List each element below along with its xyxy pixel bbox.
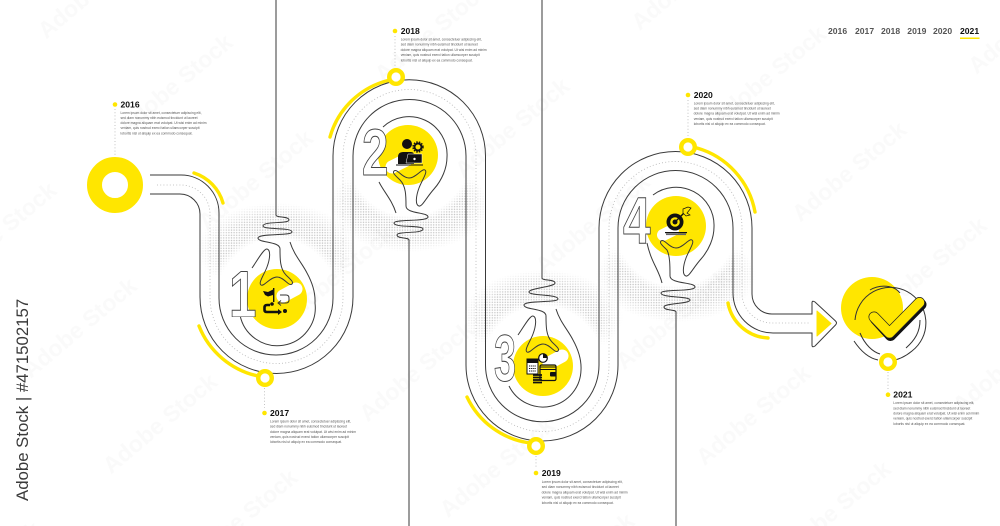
yellow accent arcs (194, 80, 768, 443)
text block 2017: sed diam nonummy nibh euismod tincidunt ut laoreet (270, 425, 347, 429)
text block 2020: Lorem ipsum dolor sit amet, consectetuer adipiscing elit, (694, 101, 775, 105)
node rings and connectors (115, 36, 895, 468)
text block 2018: lobortis nisl ut aliquip ex ea commodo consequat. (401, 58, 473, 62)
text block 2017: 2017 (270, 408, 289, 418)
text block 2016: sed diam nonummy nibh euismod tincidunt ut laoreet (120, 116, 198, 120)
text block 2016: Lorem ipsum dolor sit amet, consectetuer adipiscing elit, (120, 111, 202, 115)
number 1: 1 (229, 258, 257, 332)
text block 2017: Lorem ipsum dolor sit amet, consectetuer adipiscing elit, (270, 419, 351, 423)
winding road with arrow (150, 80, 836, 441)
bulb 3 (509, 0, 581, 407)
text block 2017: dolore magna aliquam erat volutpat. Ut wisi enim ad minim (270, 430, 356, 434)
text block 2019: 2019 (542, 468, 561, 478)
text block 2017: veniam, quis nostrud exerci tation ullamcorper suscipit (270, 435, 349, 439)
text block 2017: lobortis nisl ut aliquip ex ea commodo consequat. (270, 440, 342, 444)
text block 2017 (262, 408, 356, 444)
year navigation: 2018 (881, 26, 900, 36)
number 4: 4 (623, 184, 651, 258)
icon: check mark (874, 302, 921, 336)
arrow head yellow triangle (817, 311, 831, 336)
text block 2016: lobortis nisl ut aliquip ex ea commodo consequat. (120, 132, 193, 136)
text block 2016 (113, 100, 207, 136)
text block 2020: 2020 (694, 90, 713, 100)
text block 2020: lobortis nisl ut aliquip ex ea commodo consequat. (694, 122, 766, 126)
halftone: bulb 2 (334, 180, 484, 249)
year navigation: 2019 (907, 26, 927, 36)
year navigation: 2017 (855, 26, 874, 36)
halftone: bulb 3 (468, 273, 618, 342)
text block 2018: veniam, quis nostrud exerci tation ullamcorper suscipit (401, 53, 480, 57)
text block 2016: veniam, quis nostrud exerci tation ullamcorper suscipit (120, 126, 200, 130)
halftone: bulb 1 (202, 206, 352, 274)
bulb 4 (646, 187, 714, 526)
text block 2020: veniam, quis nostrud exerci tation ullamcorper suscipit (694, 117, 773, 121)
text block 2021: veniam, quis nostrud exerci tation ullamcorper suscipit (893, 417, 972, 421)
text block 2018 (393, 26, 487, 62)
text block 2018: sed diam nonummy nibh euismod tincidunt ut laoreet (401, 43, 478, 47)
text block 2016: 2016 (120, 100, 140, 110)
text block 2019: veniam, quis nostrud exerci tation ullamcorper suscipit (542, 496, 621, 500)
text block 2018: dolore magna aliquam erat volutpat. Ut wisi enim ad minim (401, 48, 487, 52)
text block 2021: Lorem ipsum dolor sit amet, consectetuer adipiscing elit, (893, 401, 974, 405)
year navigation: 2020 (933, 26, 952, 36)
text block 2021: sed diam nonummy nibh euismod tincidunt ut laoreet (893, 406, 970, 410)
text block 2019: Lorem ipsum dolor sit amet, consectetuer adipiscing elit, (542, 480, 623, 484)
text block 2019 (534, 468, 628, 505)
year navigation: 2021 (960, 26, 979, 36)
halftone: bulb 4 (602, 250, 750, 319)
bulb 1 (240, 0, 315, 346)
number 3: 3 (494, 322, 516, 396)
text block 2019: lobortis nisl ut aliquip ex ea commodo consequat. (542, 501, 614, 505)
start ring 2016 (94, 164, 136, 206)
year navigation (828, 26, 980, 39)
bulb 2 (378, 117, 447, 526)
icon: person with laptop and gear (396, 139, 423, 165)
year navigation: 2016 (828, 26, 847, 36)
text block 2019: sed diam nonummy nibh euismod tincidunt ut laoreet (542, 485, 619, 489)
text block 2020: dolore magna aliquam erat volutpat. Ut wisi enim ad minim (694, 112, 780, 116)
text block 2018: 2018 (401, 26, 420, 36)
final ring lines (854, 286, 926, 361)
icon: route with flag (263, 288, 289, 315)
text block 2021 (886, 390, 980, 426)
text block 2020: sed diam nonummy nibh euismod tincidunt ut laoreet (694, 107, 771, 111)
text block 2021: dolore magna aliquam erat volutpat. Ut wisi enim ad minim (893, 412, 980, 416)
text block 2021: 2021 (893, 390, 913, 400)
icon: calculator, pie chart, wallet and coins (527, 354, 556, 382)
text block 2019: dolore magna aliquam erat volutpat. Ut wisi enim ad minim (542, 490, 628, 494)
icon: target with arrow (665, 207, 691, 235)
text block 2020 (686, 90, 780, 126)
text block 2018: Lorem ipsum dolor sit amet, consectetuer adipiscing elit, (401, 37, 482, 41)
stock id side label: Adobe Stock | #471502157 (13, 299, 32, 501)
number 2: 2 (362, 116, 388, 190)
final yellow circle 2021 (841, 277, 903, 339)
text block 2021: lobortis nisl ut aliquip ex ea commodo consequat. (893, 422, 965, 426)
text block 2016: dolore magna aliquam erat volutpat. Ut wisi enim ad minim (120, 121, 207, 125)
